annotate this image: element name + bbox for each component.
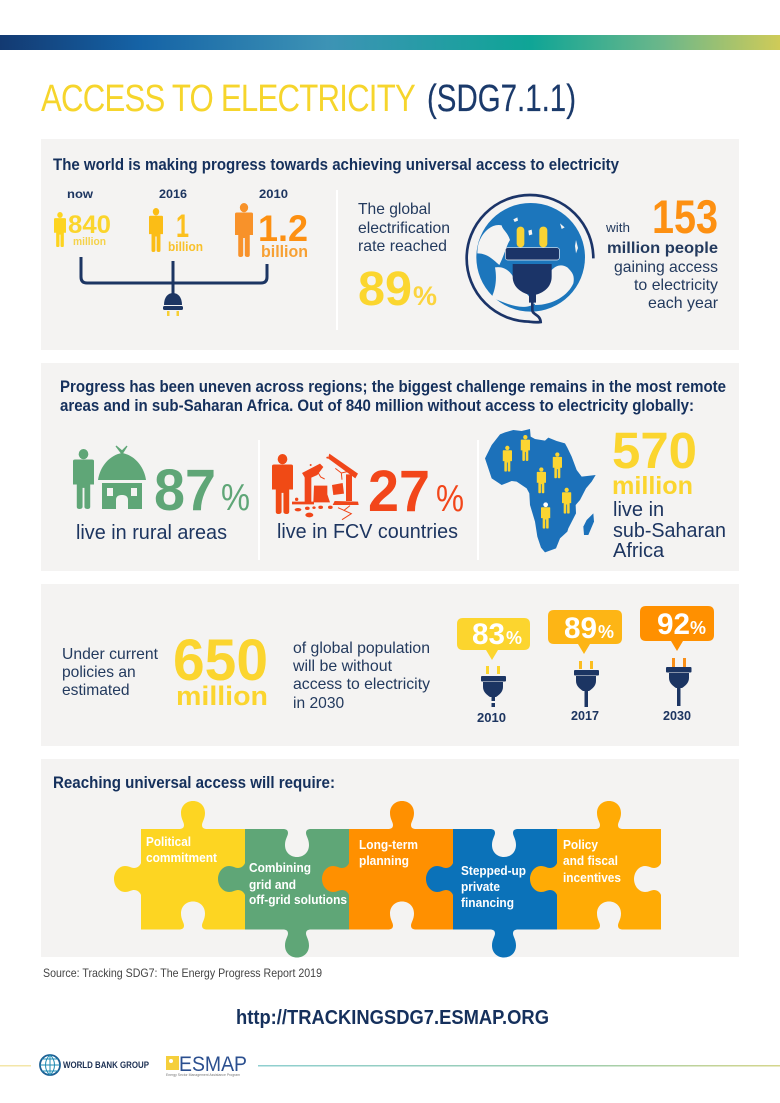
people without access now: now	[67, 187, 94, 201]
text: under current policies	[62, 646, 159, 699]
text: electrification rate: 89	[358, 263, 412, 316]
stat: sub-Saharan Africa: sub-Saharan	[613, 520, 726, 542]
text: 153 million: 153	[652, 190, 718, 243]
plug: 2017 89%: %	[598, 622, 614, 642]
stat: 650 million: 650	[173, 628, 268, 693]
text: 153 million: with	[605, 220, 630, 235]
icon: connector with plug	[81, 257, 267, 316]
people without access 2010: 2010	[259, 187, 288, 201]
puzzle piece: political commitment: commitment	[146, 850, 218, 865]
heading: world progress: The world is making progress towards achieving universal access to electricity	[53, 155, 619, 174]
source note: Source: Tracking SDG7: The Energy Progress Report 2019	[43, 966, 322, 980]
website url: http://TRACKINGSDG7.ESMAP.ORG	[236, 1007, 549, 1029]
text: under current policies: estimated	[62, 682, 130, 699]
plug: 2010 83%: 83	[472, 618, 505, 651]
stat: rural areas: 87	[154, 458, 216, 523]
plug: 2010 83%: 2010	[477, 710, 506, 725]
stat: rural areas: live in rural areas	[76, 522, 227, 544]
puzzle piece: policy and fiscal incentives: and fiscal	[563, 853, 618, 868]
logo: ESMAP: ESMAP	[179, 1053, 247, 1076]
text: electrification rate: electrification	[358, 220, 450, 237]
people without access now: million	[73, 236, 106, 248]
puzzle piece: stepped-up private financing: Stepped-up	[461, 863, 526, 878]
plug: 2030 92%: 2030	[663, 708, 691, 723]
puzzle piece: long-term planning: Long-term	[359, 837, 418, 852]
people without access 2010: 1.2	[258, 208, 308, 249]
logo: ESMAP: Energy Sector Management Assistance Program	[166, 1073, 240, 1077]
stat: sub-Saharan Africa: Africa	[613, 540, 665, 562]
puzzle piece: combining grid and off-grid: Combining	[249, 860, 311, 875]
stat: 650 million: million	[176, 681, 268, 711]
people without access 2016	[149, 187, 203, 254]
stat: FCV countries: 27	[368, 459, 430, 524]
title	[41, 78, 576, 120]
text: global population without access: will be without	[292, 658, 393, 675]
text: 153 million: each year	[648, 295, 718, 312]
text: global population without access: access to electricity	[293, 676, 430, 693]
text: under current policies: Under current	[62, 646, 159, 663]
puzzle piece: combining grid and off-grid: grid and	[249, 877, 296, 892]
stat: sub-Saharan Africa: live in	[613, 499, 664, 521]
logo: World Bank Group	[40, 1055, 150, 1075]
people without access 2010	[235, 187, 308, 261]
people without access 2016: billion	[168, 239, 203, 254]
text: electrification rate: rate reached	[358, 238, 447, 255]
text: global population without access: in 2030	[293, 695, 344, 712]
puzzle piece: stepped-up private financing: financing	[461, 895, 514, 910]
stat: rural areas: %	[221, 477, 250, 519]
people without access now	[54, 187, 111, 248]
puzzle piece: long-term planning: planning	[359, 853, 409, 868]
title: ACCESS TO ELECTRICITY	[41, 78, 416, 120]
puzzle piece: stepped-up private financing: private	[461, 879, 500, 894]
puzzle piece: long-term planning	[322, 801, 454, 930]
text: 153 million: million people	[607, 240, 718, 257]
puzzle piece: policy and fiscal incentives	[530, 801, 661, 930]
text: global population without access	[292, 640, 430, 712]
title: (SDG7.1.1)	[427, 78, 576, 120]
text: electrification rate: %	[413, 281, 437, 311]
panel: universal access requirements	[41, 759, 739, 958]
stat: FCV countries: %	[436, 478, 464, 520]
text: 153 million: to electricity	[634, 277, 718, 294]
stat: sub-Saharan Africa: million	[612, 472, 693, 500]
puzzle piece: combining grid and off-grid: off-grid solutions	[249, 892, 347, 907]
text: 153 million: gaining access	[614, 259, 718, 276]
puzzle piece: stepped-up private financing	[426, 829, 558, 958]
people without access now: 840	[68, 211, 111, 239]
stat: sub-Saharan Africa	[485, 422, 726, 562]
plug: 2030 92%: %	[690, 618, 706, 638]
footer logos	[0, 1053, 780, 1077]
logo: World Bank Group: WORLD BANK GROUP	[63, 1060, 150, 1071]
plug: 2030 92%: 92	[657, 608, 690, 641]
people without access 2016: 2016	[159, 187, 187, 201]
puzzle piece: policy and fiscal incentives: Policy	[563, 837, 599, 852]
plug: 2030 92%	[640, 606, 714, 723]
heading: requirements: Reaching universal access will require:	[53, 773, 335, 792]
heading: regional challenge: areas and in sub-Saharan Africa. Out of 840 million without access to electricity globally:	[60, 396, 694, 415]
text: global population without access: of global population	[293, 640, 430, 657]
people without access 2016: 1	[176, 208, 189, 244]
plug: 2010 83%: %	[506, 628, 522, 648]
heading: regional challenge	[60, 377, 726, 415]
puzzle piece: political commitment: Political	[146, 834, 191, 849]
text: electrification rate: The global	[358, 201, 431, 218]
plug: 2017 89%	[548, 610, 622, 723]
puzzle piece: combining grid and off-grid	[218, 829, 350, 958]
puzzle piece: political commitment	[114, 801, 246, 930]
top gradient bar	[0, 35, 780, 50]
panel: global progress	[41, 139, 739, 350]
stat: rural areas	[73, 446, 250, 544]
plug: 2017 89%: 89	[564, 612, 597, 645]
stat: FCV countries: live in FCV countries	[277, 521, 458, 543]
plug: 2010 83%	[457, 618, 530, 725]
text: electrification rate	[358, 201, 450, 316]
text: 153 million	[605, 190, 718, 312]
icon: globe with plug	[467, 195, 593, 322]
people without access 2010: billion	[261, 242, 308, 261]
panel: uneven regional progress	[41, 363, 739, 571]
panel: 2030 projection	[41, 584, 739, 746]
plug: 2017 89%: 2017	[571, 708, 599, 723]
stat: sub-Saharan Africa: 570	[612, 422, 697, 479]
stat: FCV countries	[272, 454, 464, 543]
icon: damaged house	[292, 454, 359, 520]
map: Africa with people	[485, 429, 596, 552]
text: under current policies: policies an	[62, 664, 136, 681]
puzzle piece: policy and fiscal incentives: incentives	[563, 870, 621, 885]
